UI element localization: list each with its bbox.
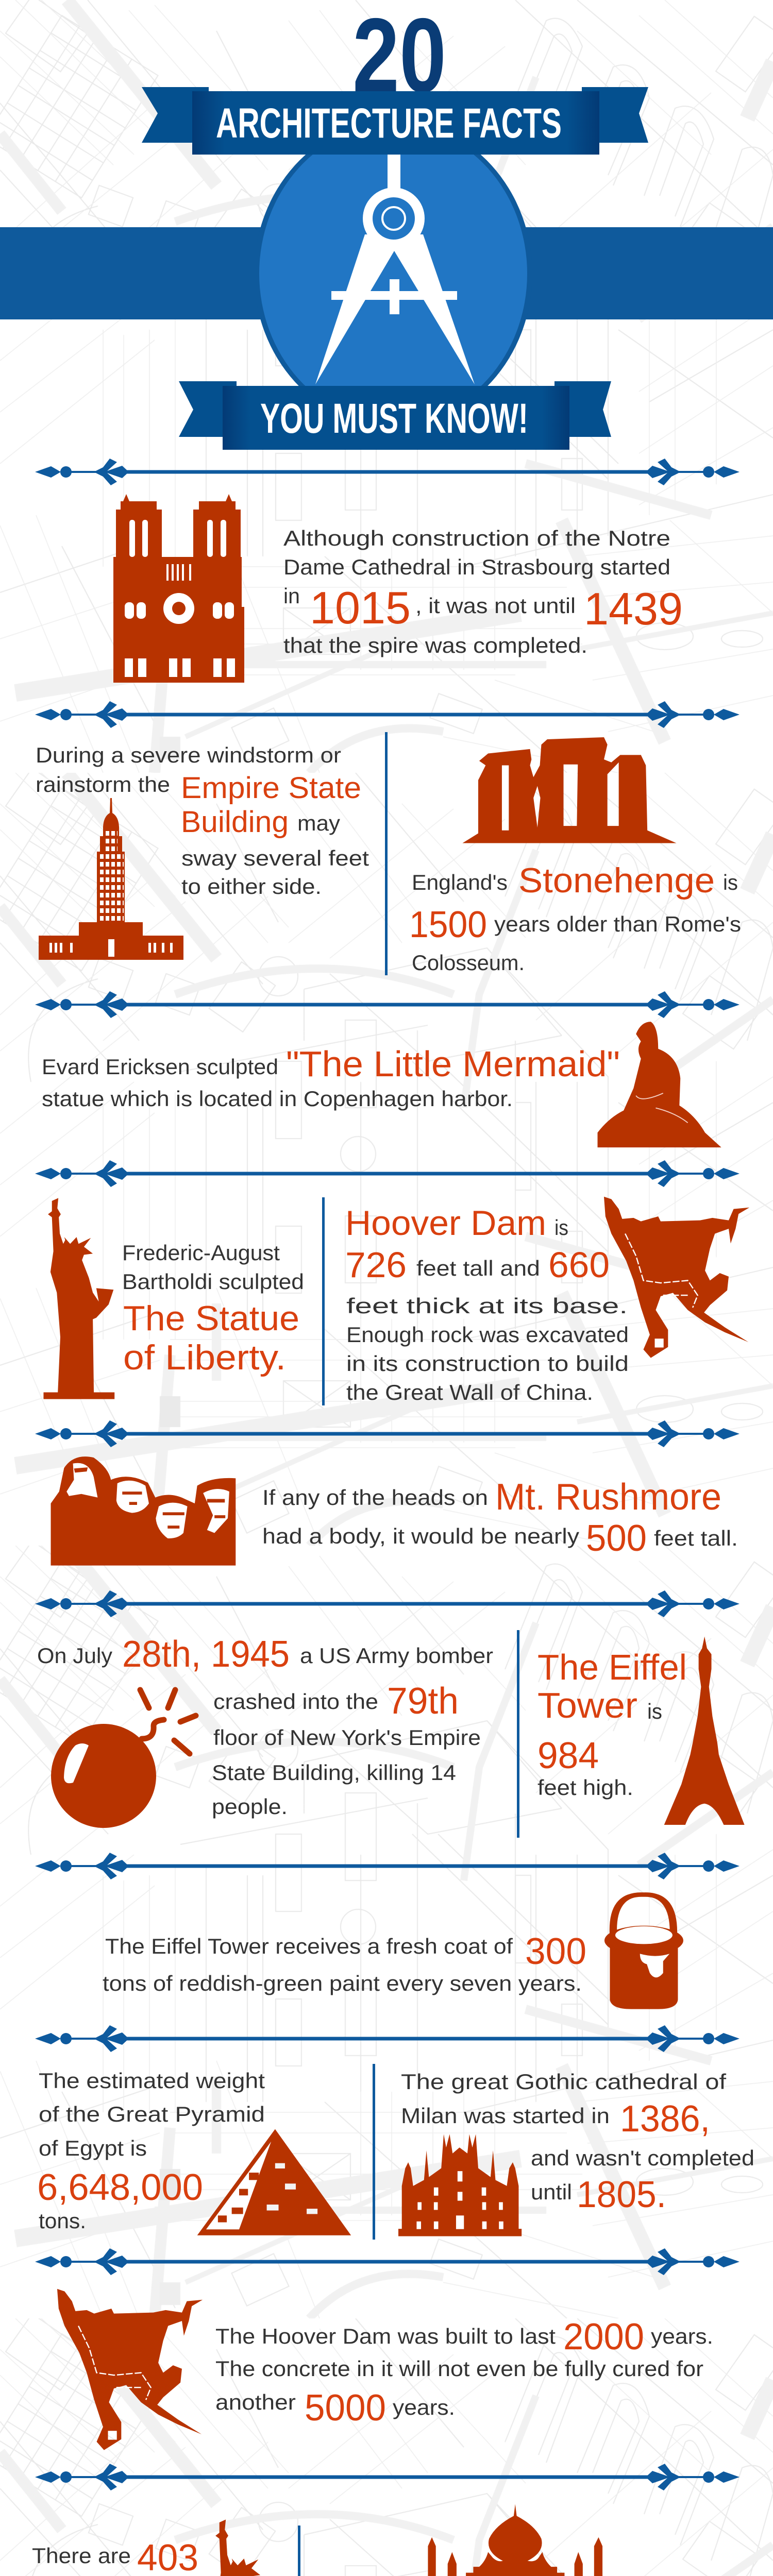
text: Hoover Dam durability fact: The Hoover Dam was built to last: [215, 2324, 556, 2348]
text: Great Pyramid fact: tons.: [39, 2209, 86, 2233]
ribbon: you must know: [179, 381, 611, 450]
text: Little Mermaid fact: [42, 1044, 620, 1111]
text: Mt. Rushmore fact: If any of the heads on: [262, 1485, 488, 1510]
text: Great Pyramid fact: The estimated weight: [39, 2069, 265, 2093]
panel: Statue of Liberty: [43, 1198, 304, 1399]
icon: Mt. Rushmore: [51, 1456, 236, 1566]
icon: Statue of Liberty: [211, 2519, 282, 2576]
text: Empire State Building fact: Building: [181, 805, 289, 839]
text: paint fact: tons of reddish-green paint every seven years.: [103, 1971, 582, 1995]
text: bomber crash fact: On July: [37, 1643, 112, 1668]
text: Mt. Rushmore fact: had a body, it would be nearly: [262, 1524, 579, 1548]
text: Milan cathedral fact: [401, 2070, 754, 2215]
text: Notre Dame fact: in: [283, 584, 300, 608]
text: bomber crash fact: State Building, killing 14: [212, 1760, 456, 1785]
text: Hoover Dam fact: 660: [548, 1245, 610, 1285]
icon: Statue of Liberty: [43, 1198, 114, 1399]
text: paint fact: [103, 1931, 586, 1995]
text: Notre Dame fact: Dame Cathedral in Strasbourg started: [283, 555, 670, 579]
text: Statue of Liberty fact: Frederic-August: [122, 1241, 280, 1265]
text: bomber crash fact: 28th, 1945: [122, 1634, 290, 1675]
text: Stonehenge fact: Stonehenge: [518, 861, 715, 900]
text: Milan cathedral fact: Milan was started in: [401, 2104, 610, 2128]
text: Empire State Building fact: sway several feet: [181, 846, 369, 870]
text: Eiffel Tower height: feet high.: [537, 1775, 633, 1800]
text: Notre Dame fact: , it was not until: [415, 594, 576, 618]
text: Stonehenge fact: 1500: [409, 904, 487, 945]
panel: Milan cathedral: [398, 2070, 754, 2236]
text: Hoover Dam fact: [345, 1204, 629, 1404]
icon: pyramid: [197, 2129, 351, 2235]
text: Empire State Building fact: to either side.: [181, 874, 322, 899]
text: Hoover Dam fact: feet thick at its base.: [346, 1294, 628, 1318]
text: Mt. Rushmore fact: 500: [586, 1518, 647, 1559]
panel: Great Pyramid: [37, 2069, 351, 2235]
ribbon: architecture facts: ARCHITECTURE FACTS: [216, 100, 562, 147]
text: Stonehenge fact: England's: [412, 870, 508, 894]
medallion: [254, 121, 532, 427]
panel: Eiffel Tower height: [537, 1636, 745, 1825]
text: Great Pyramid fact: 6,648,000: [37, 2167, 203, 2208]
icon: bomb: [51, 1690, 196, 1828]
icon: Notre Dame cathedral: [113, 494, 244, 683]
text: Hoover Dam fact: Hoover Dam: [345, 1204, 546, 1243]
text: torch steps fact: There are: [32, 2544, 131, 2568]
text: Milan cathedral fact: The great Gothic cathedral of: [401, 2070, 726, 2094]
text: Milan cathedral fact: until: [531, 2180, 572, 2204]
icon: drafting compass: [315, 152, 475, 384]
text: Empire State Building fact: may: [297, 811, 340, 835]
text: Eiffel Tower height: Tower: [537, 1685, 637, 1725]
text: Notre Dame fact: 1439: [584, 583, 683, 634]
text: Empire State Building fact: During a severe windstorm or: [36, 743, 341, 767]
text: Notre Dame fact: [283, 526, 683, 657]
text: Great Pyramid fact: of the Great Pyramid: [39, 2102, 265, 2126]
panel: bomber crash: [37, 1634, 493, 1828]
text: bomber crash fact: a US Army bomber: [300, 1643, 493, 1668]
panel: Empire State Building sway: [36, 743, 369, 960]
text: Hoover Dam durability fact: years.: [651, 2324, 713, 2348]
text: Empire State Building fact: Empire State: [181, 771, 361, 805]
text: bomber crash fact: [37, 1634, 493, 1819]
text: bomber crash fact: floor of New York's Empire: [213, 1725, 481, 1750]
text: paint fact: The Eiffel Tower receives a fresh coat of: [105, 1934, 513, 1958]
text: Hoover Dam durability fact: 5000: [305, 2387, 386, 2429]
text: Stonehenge fact: Colosseum.: [412, 951, 525, 975]
text: Great Pyramid fact: [37, 2069, 265, 2233]
text: paint fact: 300: [525, 1931, 586, 1972]
text: Hoover Dam durability fact: 2000: [563, 2316, 644, 2358]
text: Statue of Liberty fact: of Liberty.: [123, 1338, 286, 1377]
text: Hoover Dam durability fact: another: [215, 2390, 296, 2414]
icon: Stonehenge: [462, 737, 677, 843]
panel: Eiffel Tower paint: [103, 1894, 683, 2009]
text: Notre Dame fact: 1015: [310, 582, 411, 633]
text: Eiffel Tower height: is: [647, 1699, 662, 1723]
text: Hoover Dam durability fact: [215, 2316, 713, 2429]
text: Hoover Dam durability fact: The concrete in it will not even be fully cured for: [215, 2357, 703, 2381]
panel: Hoover Dam: [345, 1197, 749, 1404]
text: Little Mermaid fact: "The Little Mermaid": [286, 1044, 620, 1084]
ribbon: you must know: YOU MUST KNOW!: [260, 395, 528, 442]
panel: torch steps: [32, 2519, 282, 2576]
text: Statue of Liberty fact: [122, 1241, 304, 1377]
icon: Eiffel Tower: [664, 1636, 745, 1825]
panel: Hoover Dam durability: [57, 2289, 713, 2450]
text: Stonehenge fact: [409, 861, 741, 975]
ribbon: architecture facts: [142, 87, 648, 155]
text: bomber crash fact: crashed into the: [213, 1689, 378, 1714]
text: Empire State Building fact: [36, 743, 369, 899]
icon: paint bucket: [604, 1894, 683, 2009]
text: Mt. Rushmore fact: Mt. Rushmore: [495, 1477, 721, 1518]
panel: Stonehenge: [409, 737, 741, 975]
text: Hoover Dam fact: is: [554, 1215, 568, 1240]
text: Eiffel Tower height: The Eiffel: [537, 1647, 687, 1687]
text: Empire State Building fact: rainstorm the: [36, 772, 170, 796]
text: bomber crash fact: 79th: [387, 1681, 459, 1722]
text: Milan cathedral fact: 1386,: [620, 2098, 710, 2140]
text: Milan cathedral fact: and wasn't completed: [531, 2146, 754, 2170]
text: Stonehenge fact: years older than Rome's: [494, 912, 741, 936]
panel: Little Mermaid: [42, 1022, 721, 1147]
panel: Notre Dame: [113, 494, 683, 683]
text: Notre Dame fact: that the spire was completed.: [283, 633, 587, 657]
text: Milan cathedral fact: 1805.: [577, 2174, 666, 2215]
icon: Hoover Dam map: [604, 1197, 749, 1358]
text: Mt. Rushmore fact: feet tall.: [654, 1526, 738, 1550]
icon: mermaid statue: [598, 1022, 721, 1147]
icon: Hoover Dam map: [57, 2289, 203, 2450]
text: Mt. Rushmore fact: [262, 1477, 738, 1559]
text: Statue of Liberty fact: The Statue: [123, 1299, 299, 1338]
text: Eiffel Tower height: [537, 1647, 687, 1800]
text: Hoover Dam fact: the Great Wall of China.: [346, 1380, 593, 1404]
panel: Taj Mahal: [317, 2504, 759, 2576]
text: bomber crash fact: people.: [212, 1794, 288, 1819]
text: Hoover Dam fact: 726: [345, 1245, 407, 1285]
header: [0, 0, 773, 450]
panel: Mt. Rushmore: [51, 1456, 738, 1566]
text: Hoover Dam durability fact: years.: [393, 2395, 455, 2419]
text: Little Mermaid fact: statue which is located in Copenhagen harbor.: [42, 1087, 513, 1111]
icon: Taj Mahal: [423, 2504, 607, 2576]
text: Hoover Dam fact: Enough rock was excavated: [346, 1323, 629, 1347]
text: Hoover Dam fact: feet tall and: [416, 1256, 540, 1280]
text: Hoover Dam fact: in its construction to build: [346, 1351, 629, 1376]
text: Great Pyramid fact: of Egypt is: [39, 2136, 147, 2160]
text: Notre Dame fact: Although construction of the Notre: [283, 526, 670, 550]
text: torch steps fact: [32, 2537, 207, 2576]
icon: Milan cathedral: [398, 2134, 522, 2236]
icon: Empire State Building: [39, 798, 183, 960]
text: Eiffel Tower height: 984: [537, 1735, 599, 1776]
text: Little Mermaid fact: Evard Ericksen sculpted: [42, 1055, 278, 1079]
blue band: [0, 227, 773, 319]
text: Stonehenge fact: is: [723, 870, 738, 894]
text: Statue of Liberty fact: Bartholdi sculpted: [122, 1269, 304, 1294]
